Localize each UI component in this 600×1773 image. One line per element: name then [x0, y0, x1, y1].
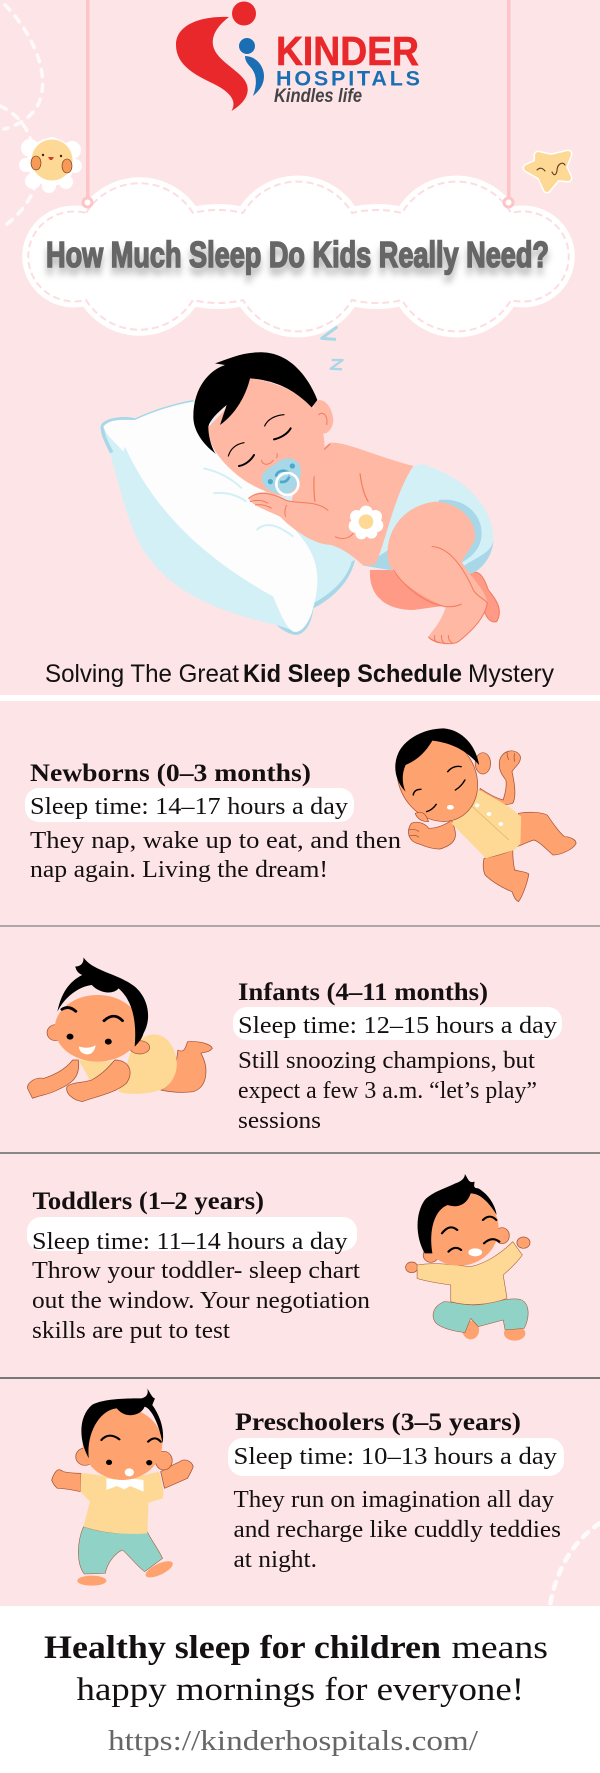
white band — [0, 695, 600, 701]
closing message: means — [452, 1630, 548, 1666]
sleep time pill: preschoolers — [228, 1438, 564, 1476]
icon: sun sticker — [19, 137, 82, 193]
subtitle: Mystery — [468, 660, 554, 688]
closing message: Healthy sleep for children — [44, 1630, 441, 1666]
diaper — [363, 464, 493, 574]
panel: newborns — [25, 726, 576, 902]
far leg — [370, 570, 470, 610]
heading: newborns: Newborns (0–3 months) — [30, 760, 311, 787]
text: newborn description: They nap, wake up to eat, and then — [30, 827, 401, 854]
logo name KINDER: KINDER — [276, 28, 419, 74]
subtitle: Kid Sleep Schedule — [243, 660, 462, 688]
illustration: sleeping baby on pillow — [101, 327, 499, 644]
text: infant description: sessions — [238, 1107, 321, 1134]
text: toddler description: out the window. Your negotiation — [32, 1287, 370, 1314]
footer panel — [0, 1606, 600, 1773]
flower sticker — [349, 506, 383, 539]
illustration: newborn baby — [385, 726, 576, 902]
text: newborn description — [30, 827, 401, 883]
logo: Kinder Hospitals — [176, 2, 420, 111]
closed eyes — [228, 415, 291, 466]
text: preschooler description: They run on imagination all day — [234, 1486, 555, 1513]
text: infant description — [238, 1047, 537, 1134]
text: toddler description: Throw your toddler- sleep chart — [32, 1257, 360, 1284]
text: preschooler description: at night. — [234, 1546, 317, 1573]
text: infant description: expect a few 3 a.m. “let’s play” — [238, 1077, 537, 1104]
icon: star sticker — [527, 154, 568, 189]
ear — [313, 400, 333, 434]
text: preschooler description — [234, 1486, 561, 1573]
text: toddler description: skills are put to test — [32, 1317, 230, 1344]
logo name HOSPITALS: HOSPITALS — [276, 66, 420, 90]
nose — [261, 453, 277, 464]
panel: preschoolers — [52, 1388, 564, 1586]
logo mark — [176, 2, 264, 111]
illustration: toddler — [406, 1174, 530, 1341]
website url: https://kinderhospitals.com/ — [108, 1725, 479, 1757]
closing message — [44, 1630, 548, 1708]
sleep time pill: toddlers — [27, 1217, 357, 1255]
arm — [248, 492, 353, 545]
logo tagline: Kindles life — [274, 86, 362, 107]
divider — [0, 1377, 600, 1379]
illustration: infant baby — [27, 957, 212, 1102]
hanging strings — [86, 0, 510, 197]
heading: toddlers: Toddlers (1–2 years) — [32, 1188, 264, 1215]
pillow — [101, 400, 355, 635]
sleep time pill: infants: Sleep time: 12–15 hours a day — [238, 1012, 558, 1039]
sleep time pill: toddlers: Sleep time: 11–14 hours a day — [32, 1228, 348, 1255]
panel: toddlers — [27, 1174, 530, 1344]
heading: preschoolers: Preschoolers (3–5 years) — [235, 1409, 521, 1436]
closing message: happy mornings for everyone! — [76, 1672, 524, 1708]
subtitle: Solving The Great — [45, 660, 239, 688]
heading: infants: Infants (4–11 months) — [238, 979, 488, 1006]
text: toddler description — [32, 1257, 370, 1344]
cloud title panel — [28, 182, 569, 331]
face — [208, 378, 324, 497]
text: infant description: Still snoozing champions, but — [238, 1047, 535, 1074]
pacifier — [262, 458, 301, 495]
sleep z letters — [322, 327, 343, 369]
torso — [287, 443, 413, 566]
text: preschooler description: and recharge like cuddly teddies — [234, 1516, 561, 1543]
panel: infants — [27, 957, 562, 1134]
divider — [0, 1152, 600, 1154]
text: newborn description: nap again. Living the dream! — [30, 856, 328, 883]
subtitle — [45, 660, 554, 688]
sleep time pill: preschoolers: Sleep time: 10–13 hours a day — [234, 1443, 558, 1470]
hair — [193, 352, 317, 454]
sleep time pill: newborns: Sleep time: 14–17 hours a day — [30, 793, 349, 820]
illustration: preschooler — [52, 1388, 193, 1586]
near leg — [387, 502, 487, 644]
divider — [0, 925, 600, 927]
